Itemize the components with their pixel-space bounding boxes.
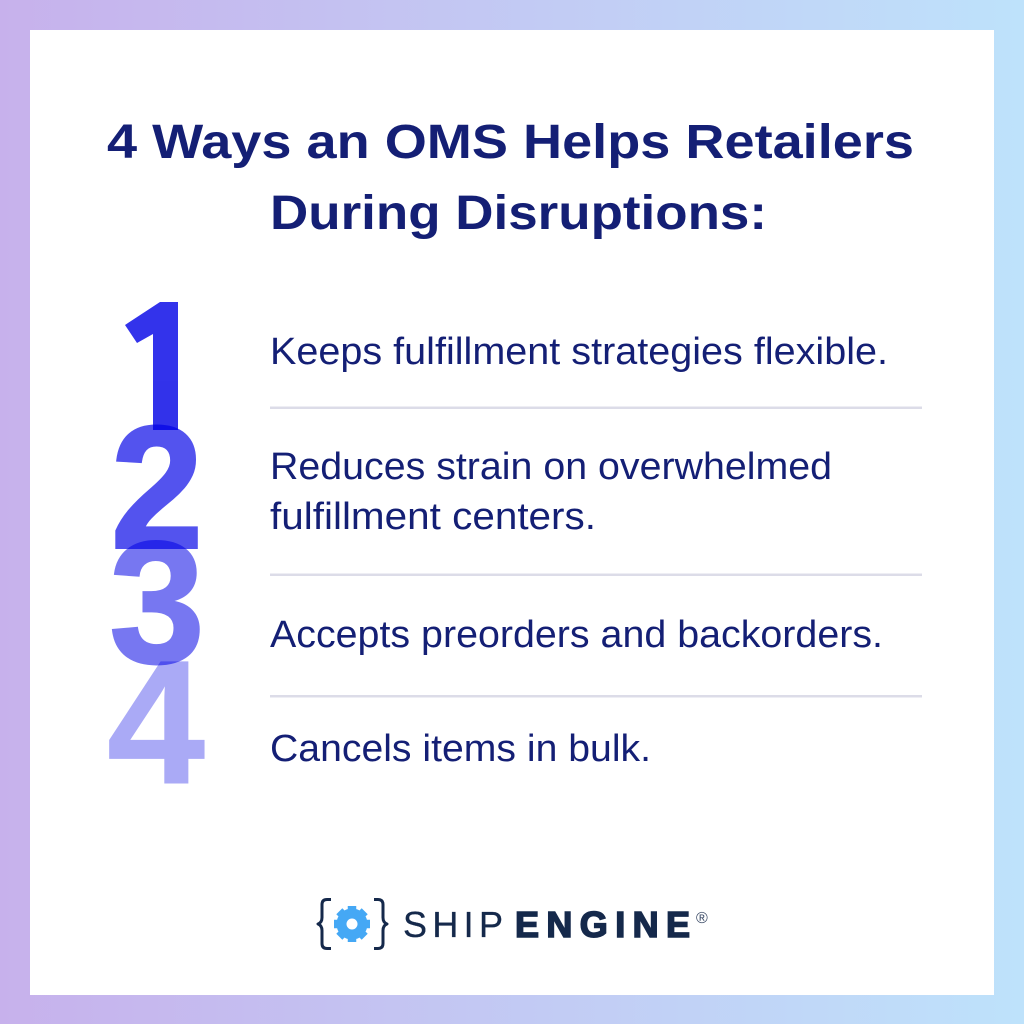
icon: gear	[334, 906, 370, 942]
numeral 4: 4	[107, 625, 205, 821]
ShipEngine logo: ENGINE	[515, 904, 690, 945]
numeral 3: 3	[109, 504, 205, 700]
icon: right brace	[374, 900, 387, 948]
list item 2: Reduces strain on overwhelmed	[270, 446, 832, 488]
wordmark: SHIP	[403, 904, 503, 945]
list item 2	[270, 446, 832, 538]
icon: left brace	[318, 900, 331, 948]
numerals 1 to 4	[109, 302, 204, 784]
ShipEngine logo	[318, 900, 708, 948]
list item 3: Accepts preorders and backorders.	[270, 614, 883, 656]
title: During Disruptions:	[270, 187, 767, 240]
title: 4 Ways an OMS Helps Retailers	[107, 116, 914, 169]
numeral 1: 1	[100, 268, 200, 469]
list item 1: Keeps fulfillment strategies flexible.	[270, 331, 888, 373]
title	[107, 116, 914, 240]
list item 4: Cancels items in bulk.	[270, 728, 651, 770]
ShipEngine logo: ®	[696, 910, 708, 927]
numeral 2: 2	[111, 390, 203, 584]
list item 2: fulfillment centers.	[270, 496, 596, 538]
